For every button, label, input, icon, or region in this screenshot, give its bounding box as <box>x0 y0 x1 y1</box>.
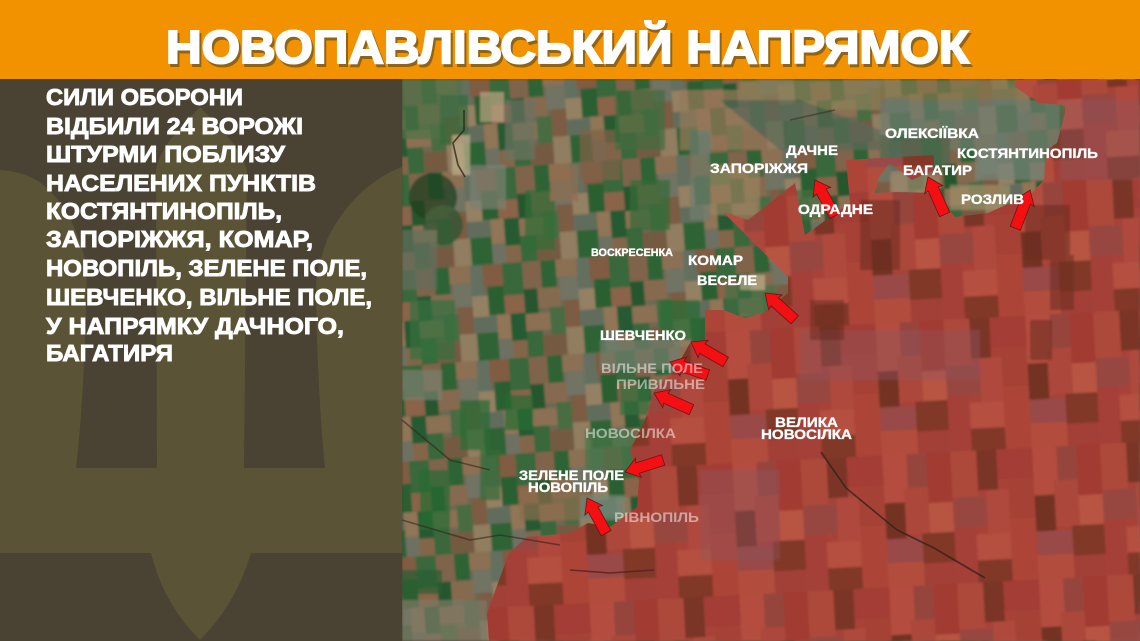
map labels: settlements: НОВОСІЛКА <box>585 425 676 441</box>
map: satellite fields <box>402 79 1140 641</box>
map labels: settlements: ОЛЕКСІЇВКА <box>885 125 979 141</box>
map labels: settlements: ВІЛЬНЕ ПОЛЕ <box>601 360 703 376</box>
map labels: settlements: НОВОСІЛКА <box>761 426 852 442</box>
text block: defence forces summary <box>46 84 372 366</box>
text block: defence forces summary: ШЕВЧЕНКО, ВІЛЬНЕ ПОЛЕ, <box>46 284 372 310</box>
map labels: settlements: ЗАПОРІЖЖЯ <box>710 160 808 176</box>
map labels: settlements: РОЗЛИВ <box>961 191 1024 207</box>
arrows: enemy assault directions <box>578 173 1039 538</box>
map labels: settlements: РІВНОПІЛЬ <box>614 509 699 525</box>
map labels: settlements: ШЕВЧЕНКО <box>600 327 686 343</box>
map: tinted fields in occupied area <box>700 100 1140 560</box>
map labels: settlements: НОВОПІЛЬ <box>528 479 608 495</box>
text block: defence forces summary: ЗАПОРІЖЖЯ, КОМАР, <box>46 226 313 252</box>
map labels: settlements: КОМАР <box>688 252 743 268</box>
text block: defence forces summary: У НАПРЯМКУ ДАЧНОГО, <box>46 313 344 339</box>
text block: defence forces summary: СИЛИ ОБОРОНИ <box>46 84 243 110</box>
map labels: settlements: ВЕЛИКА <box>775 414 838 430</box>
text block: defence forces summary: ШТУРМИ ПОБЛИЗУ <box>46 141 286 167</box>
map: rivers <box>402 110 985 578</box>
icon: trident watermark <box>0 107 402 640</box>
map labels: settlements: КОСТЯНТИНОПІЛЬ <box>957 145 1098 161</box>
map: occupied territory overlay <box>487 80 1140 641</box>
text block: defence forces summary: БАГАТИРЯ <box>46 340 173 366</box>
panel: left olive background <box>0 79 402 641</box>
map labels: settlements: ВОСКРЕСЕНКА <box>591 247 673 259</box>
map labels: settlements <box>519 125 1098 525</box>
text block: defence forces summary: НОВОПІЛЬ, ЗЕЛЕНЕ ПОЛЕ, <box>46 255 367 281</box>
text block: defence forces summary: НАСЕЛЕНИХ ПУНКТІВ <box>46 170 316 196</box>
map labels: settlements: ОДРАДНЕ <box>798 201 873 217</box>
title: НОВОПАВЛІВСЬКИЙ НАПРЯМОК <box>166 21 970 73</box>
header bar <box>0 0 1140 79</box>
map labels: settlements: ПРИВІЛЬНЕ <box>616 376 705 392</box>
text block: defence forces summary: КОСТЯНТИНОПІЛЬ, <box>46 198 282 224</box>
map labels: settlements: БАГАТИР <box>903 162 972 178</box>
text block: defence forces summary: ВІДБИЛИ 24 ВОРОЖІ <box>46 113 303 139</box>
map labels: settlements: ВЕСЕЛЕ <box>697 272 757 288</box>
panel: map <box>402 79 1140 641</box>
map labels: settlements: ЗЕЛЕНЕ ПОЛЕ <box>519 467 624 483</box>
map: terrain patches <box>402 79 1060 641</box>
map labels: settlements: ДАЧНЕ <box>786 142 838 158</box>
